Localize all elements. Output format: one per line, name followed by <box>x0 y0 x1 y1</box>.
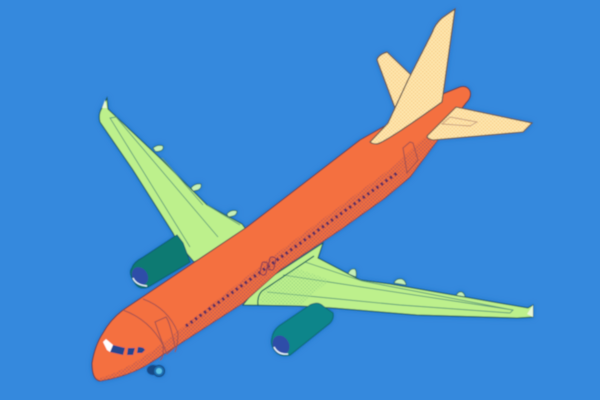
cockpit windows <box>103 339 145 355</box>
pylon fairings on left wing <box>153 145 237 217</box>
dithered underside shading <box>96 130 440 381</box>
fuselage <box>92 86 470 381</box>
left stabilizer <box>377 52 411 108</box>
left engine <box>128 235 190 288</box>
front door <box>155 317 175 354</box>
rear door <box>403 142 418 173</box>
nose cone seam <box>123 299 178 360</box>
right engine <box>269 303 333 358</box>
nose landing gear <box>147 365 164 376</box>
right wing <box>243 243 533 318</box>
tail fin <box>370 9 455 144</box>
plane <box>92 9 533 381</box>
pylon fairings on right wing <box>348 269 465 297</box>
cabin windows row <box>186 173 397 326</box>
over-wing exit doors <box>260 257 276 275</box>
right stabilizer <box>427 107 532 140</box>
left wing <box>99 98 250 262</box>
